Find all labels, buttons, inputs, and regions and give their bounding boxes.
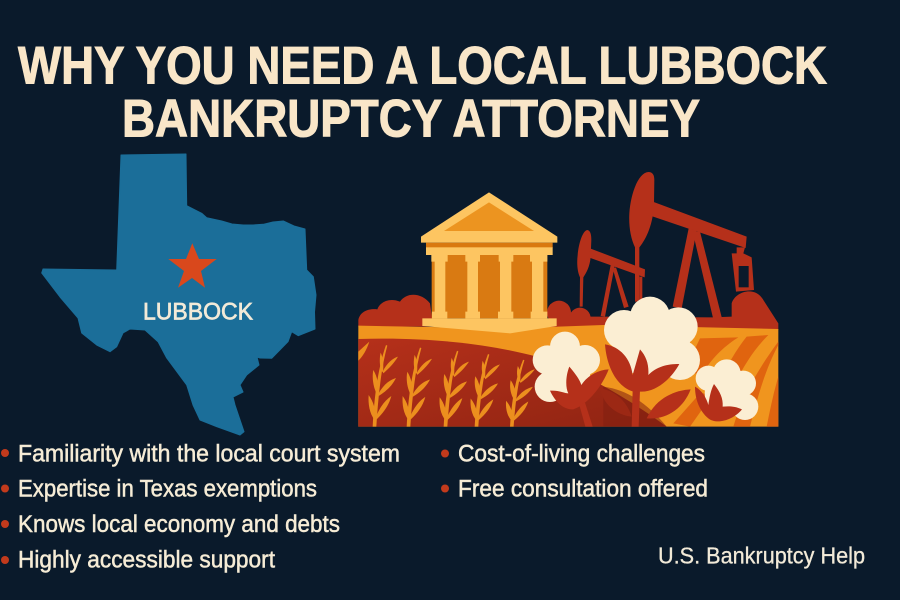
panel: Texas map [42,154,316,435]
list item: accessible support: Highly accessible support [18,546,275,574]
hills and shrubs [358,291,778,330]
map: Texas outline [42,154,316,435]
list item: court system: Familiarity with the local court system [18,440,400,468]
list item: cost of living: Cost-of-living challenges [458,440,705,468]
icon: wheat stalks [358,342,535,427]
pumpjack opening [739,266,749,287]
icon: large oil pumpjack [629,172,754,319]
icon: small oil pumpjack [577,230,645,317]
icon: left cotton boll [533,332,609,427]
title: BANKRUPTCY ATTORNEY [122,90,700,148]
list item: local economy: Knows local economy and debts [18,511,340,538]
title [18,36,827,148]
field: striped right side [673,335,778,427]
panel: key reasons right column [441,440,708,502]
icon: Lubbock star [168,243,217,288]
panel: Lubbock landscape illustration [358,172,778,427]
field: orange band [358,325,778,427]
panel: key reasons left column [1,440,400,574]
list item: free consultation: Free consultation offered [458,476,708,502]
icon: large cotton boll [600,297,700,427]
icon: right cotton boll [695,359,758,421]
list item: Texas exemptions: Expertise in Texas exemptions [18,476,317,502]
icon: courthouse [421,192,557,333]
map label: Lubbock: LUBBOCK [143,298,253,326]
field: red wheat hill [358,339,667,427]
brand credit: U.S. Bankruptcy Help [658,542,865,568]
